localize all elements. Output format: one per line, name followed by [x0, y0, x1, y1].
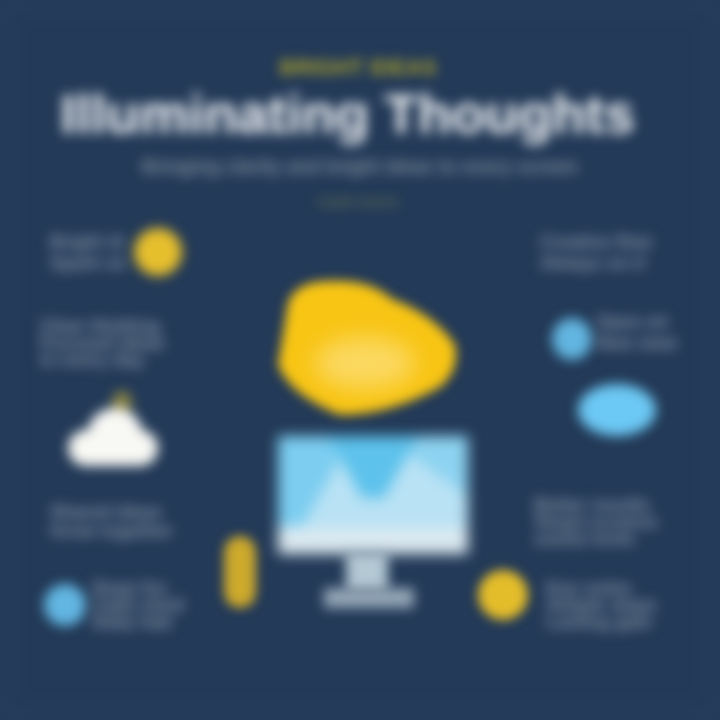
cloud base	[68, 430, 158, 466]
text block: left 2: in every day	[40, 350, 144, 370]
text block: right 4	[542, 577, 660, 636]
text block: left 4	[88, 576, 188, 635]
small caption: read more	[317, 192, 399, 211]
text block: right 3: Smart screens	[534, 512, 658, 532]
text block: left 3: Shared ideas	[50, 502, 162, 522]
text block: left 1	[46, 230, 130, 276]
text block: right 2: New view	[596, 333, 677, 353]
text block: left 2	[36, 314, 168, 373]
text block: left 4: Daily hab	[92, 612, 172, 632]
text block: right 4: Key notes	[546, 578, 632, 598]
icon: yellow bulb blob	[270, 272, 464, 424]
text block: right 4: Lasting gain	[546, 612, 652, 632]
icon: white cloud with bulb	[59, 384, 167, 476]
subtitle: Bringing clarity and bright ideas to every screen	[142, 157, 578, 178]
monitor stand	[346, 552, 388, 592]
icon: computer monitor	[278, 436, 468, 554]
eyebrow label: BRIGHT IDEAS	[279, 55, 437, 80]
text block: right 3: Better results	[534, 495, 650, 515]
text block: left 1: Spark on	[50, 253, 127, 273]
icon: blue cloud	[578, 384, 656, 436]
text block: left 4: Deep foc	[92, 578, 168, 598]
text block: left 2: Clear thinking	[40, 316, 160, 336]
icon: blue circle left	[44, 584, 86, 626]
text block: right 1: Always on it	[540, 253, 645, 273]
text block: right 2	[592, 310, 680, 355]
icon: yellow pill	[224, 536, 256, 608]
icon: blue circle right	[552, 318, 592, 360]
text block: right 1	[536, 230, 656, 276]
text block: left 2: Focused ideas	[40, 333, 165, 353]
text block: left 1: Bright id	[50, 232, 124, 252]
text block: right 3: useful tools	[534, 529, 635, 549]
screen base	[278, 528, 468, 554]
monitor foot	[324, 588, 414, 608]
screen right panel	[408, 436, 468, 496]
text block: right 3	[529, 493, 661, 550]
text block: left 4: Calm mind	[92, 595, 184, 615]
text block: right 4: Simple steps	[546, 595, 657, 615]
text block: right 2: Open mi	[596, 312, 668, 332]
icon: yellow circle left	[134, 228, 182, 276]
title: Illuminating Thoughts	[60, 83, 635, 145]
screen left panel	[278, 436, 338, 526]
text block: right 1: Creative flow	[540, 232, 652, 252]
screen centre	[328, 436, 418, 498]
icon: yellow circle bottom	[478, 570, 528, 620]
text block: left 3: Grow together	[50, 521, 173, 541]
cloud puff	[88, 408, 142, 458]
bulb tip	[112, 391, 132, 413]
text block: left 3	[46, 500, 175, 546]
